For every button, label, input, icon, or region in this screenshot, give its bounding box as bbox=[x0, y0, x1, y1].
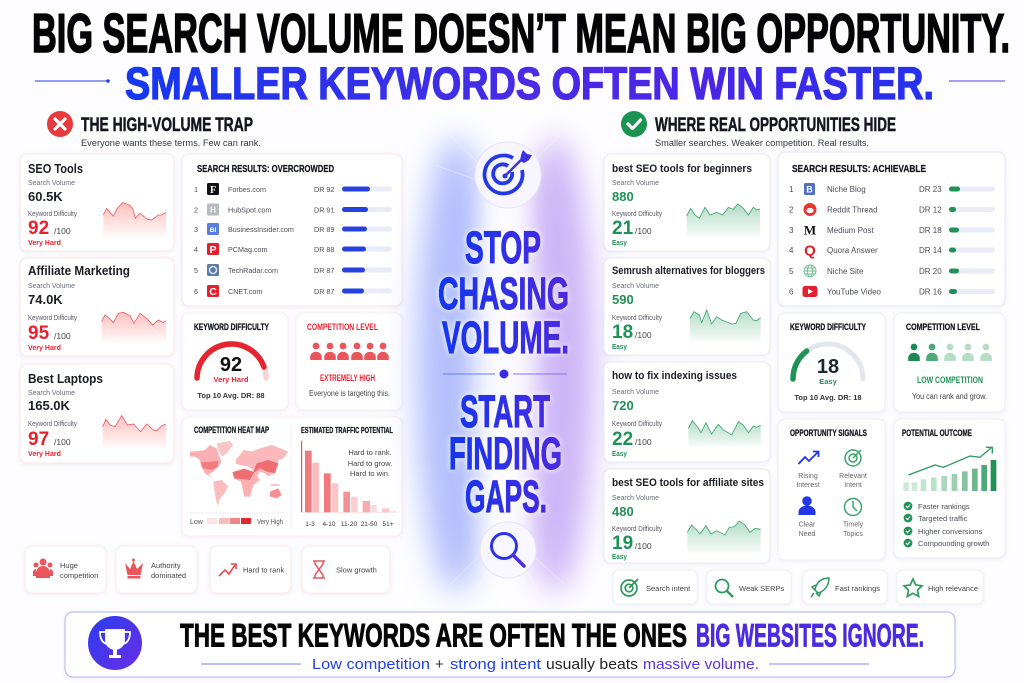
subheading text: Everyone wants these terms. Few can rank. bbox=[81, 138, 261, 149]
left rule bbox=[35, 79, 110, 83]
panel: right keyword card best SEO tools for beginners: Search Volume bbox=[612, 178, 659, 187]
row: CNET: C bbox=[209, 286, 217, 298]
icon: people row bbox=[310, 343, 389, 360]
traffic heading: ESTIMATED TRAFFIC POTENTIAL bbox=[301, 425, 393, 435]
signal: rising interest: Interest bbox=[796, 482, 820, 489]
row: HubSpot: H bbox=[210, 206, 216, 214]
signal: rising interest bbox=[796, 452, 820, 489]
icon: group bbox=[33, 558, 53, 578]
panel heading: SEARCH RESULTS: ACHIEVABLE bbox=[792, 163, 926, 175]
panel: heat map and traffic potential bbox=[182, 417, 402, 536]
panel: left keyword card SEO Tools: /100 bbox=[54, 226, 71, 236]
outcome list: Compounding growth bbox=[918, 539, 989, 548]
panel: keyword difficulty left: 92 bbox=[220, 354, 242, 376]
bar axis labels: 21-50 bbox=[361, 521, 378, 528]
divider with dot bbox=[443, 370, 567, 378]
panel: right keyword card Semrush alternatives: Semrush alternatives for bloggers bbox=[612, 265, 765, 277]
panel heading: SEARCH RESULTS: OVERCROWDED bbox=[197, 163, 334, 175]
panel: left keyword card Affiliate Marketing: /100 bbox=[54, 331, 71, 341]
panel: keyword difficulty right: KEYWORD DIFFICULTY bbox=[790, 322, 866, 332]
callout: start finding gaps: GAPS. bbox=[465, 471, 547, 522]
outcome list: Targeted traffic bbox=[918, 514, 968, 523]
panel: left keyword card Affiliate Marketing: Affiliate Marketing bbox=[28, 263, 130, 278]
panel: search results overcrowded bbox=[182, 154, 402, 306]
row: CNET: CNET.com bbox=[228, 287, 262, 296]
bar axis labels: 11-20 bbox=[341, 521, 357, 528]
heat map heading: COMPETITION HEAT MAP bbox=[194, 425, 269, 435]
icon: magnifier bbox=[480, 522, 536, 578]
bar axis labels: 4-10 bbox=[322, 521, 336, 528]
row: YouTube Video: DR 16 bbox=[919, 288, 942, 296]
panel: keyword difficulty left: Very Hard bbox=[213, 375, 249, 384]
chip: authority dominated bbox=[116, 546, 197, 593]
panel: left keyword card SEO Tools: Keyword Difficulty bbox=[28, 211, 77, 218]
panel: right keyword card best SEO tools for beginners: Keyword Difficulty bbox=[612, 211, 662, 218]
panel: left keyword card SEO Tools: 92 bbox=[28, 218, 49, 239]
panel: opportunity signals bbox=[778, 419, 885, 560]
row: PCMag: 4 bbox=[194, 245, 198, 254]
outcome list: Faster rankings bbox=[918, 502, 970, 511]
callout: stop chasing volume: STOP bbox=[465, 222, 541, 273]
callout: start finding gaps bbox=[449, 386, 562, 522]
callout: start finding gaps: FINDING bbox=[449, 428, 562, 479]
chip: search intent: Search intent bbox=[646, 584, 691, 593]
panel: left keyword card SEO Tools: SEO Tools bbox=[28, 161, 83, 176]
signal: timely topics: Topics bbox=[843, 531, 863, 538]
row: Reddit Thread bbox=[789, 203, 995, 216]
chart: sparkline bbox=[687, 521, 761, 553]
panel: left keyword card Affiliate Marketing: Very Hard bbox=[28, 343, 61, 352]
panel: left keyword card Affiliate Marketing: 95 bbox=[28, 323, 50, 344]
row: TechRadar: TechRadar.com bbox=[228, 266, 278, 275]
row: Quora Answer: Quora Answer bbox=[827, 246, 878, 255]
panel: left keyword card SEO Tools: 60.5K bbox=[28, 189, 63, 204]
panel: right keyword card how to fix indexing issues: Easy bbox=[612, 449, 628, 458]
row: HubSpot: DR 91 bbox=[314, 206, 334, 214]
panel: right keyword card best SEO tools for beginners: 880 bbox=[612, 189, 634, 204]
icon: trophy bbox=[88, 616, 142, 670]
panel: right keyword card Semrush alternatives: Keyword Difficulty bbox=[612, 315, 662, 322]
map legend: Low bbox=[190, 519, 204, 526]
banner tagline: + bbox=[435, 656, 444, 673]
row: Medium Post bbox=[789, 222, 995, 238]
chip: fast rankings bbox=[803, 570, 887, 604]
panel: keyword difficulty left: Top 10 Avg. DR: 88 bbox=[197, 391, 265, 400]
row: TechRadar: 5 bbox=[194, 266, 198, 275]
panel: left keyword card Best Laptops: 165.0K bbox=[28, 398, 71, 413]
banner headline: THE BEST KEYWORDS ARE OFTEN THE ONES bbox=[180, 618, 687, 654]
panel: opportunity signals: OPPORTUNITY SIGNALS bbox=[790, 428, 867, 438]
chart annotation bbox=[348, 448, 392, 478]
panel: right keyword card Semrush alternatives: Search Volume bbox=[612, 281, 659, 290]
row: CNET: 6 bbox=[194, 287, 198, 296]
callout: stop chasing volume bbox=[438, 222, 569, 363]
panel: right keyword card how to fix indexing issues: 720 bbox=[612, 398, 634, 413]
chart annotation: Hard to win. bbox=[350, 469, 390, 478]
row: Niche Blog: 1 bbox=[789, 185, 794, 194]
panel: right keyword card how to fix indexing issues: Keyword Difficulty bbox=[612, 421, 662, 428]
chart: sparkline bbox=[688, 421, 761, 447]
row: Niche Blog: B bbox=[806, 184, 813, 194]
row: TechRadar: DR 87 bbox=[314, 266, 334, 275]
row: PCMag: P bbox=[209, 244, 217, 256]
outcome list bbox=[904, 502, 989, 548]
panel: right keyword card best SEO tools for affiliate sites bbox=[604, 469, 770, 563]
signal: clear need bbox=[798, 496, 816, 538]
banner tagline: massive volume. bbox=[643, 656, 759, 673]
panel: right keyword card how to fix indexing issues: Search Volume bbox=[612, 387, 659, 396]
row: Reddit Thread: DR 12 bbox=[919, 206, 942, 214]
signal: relevant intent: Relevant bbox=[839, 473, 867, 480]
right rule bbox=[949, 80, 1005, 82]
row: CNET: DR 87 bbox=[314, 287, 334, 296]
bar axis labels: 51+ bbox=[382, 521, 394, 528]
chart: world map bbox=[190, 441, 288, 506]
row: CNET bbox=[194, 285, 392, 298]
icon: star bbox=[904, 579, 922, 596]
row: Quora Answer bbox=[789, 242, 995, 260]
callout: stop chasing volume: CHASING bbox=[438, 268, 569, 319]
panel: right keyword card Semrush alternatives bbox=[604, 258, 770, 355]
panel: left keyword card Affiliate Marketing: Search Volume bbox=[28, 281, 75, 290]
panel: left keyword card Affiliate Marketing: Keyword Difficulty bbox=[28, 315, 77, 322]
banner tagline: Low competition bbox=[312, 656, 430, 673]
chip: fast rankings: Fast rankings bbox=[835, 584, 880, 593]
chip: huge competition: competition bbox=[60, 571, 98, 580]
chart: sparkline bbox=[690, 310, 761, 342]
panel: competition level right: You can rank and grow. bbox=[912, 392, 987, 401]
row: PCMag bbox=[194, 243, 392, 256]
chip: slow growth bbox=[302, 546, 390, 593]
chart: sparkline bbox=[103, 203, 166, 237]
icon: target bbox=[475, 142, 541, 208]
panel: competition level left: EXTREMELY HIGH bbox=[320, 373, 375, 383]
row: Forbes bbox=[194, 183, 392, 196]
row: BusinessInsider: BI bbox=[210, 227, 216, 234]
panel: competition level left bbox=[296, 313, 402, 410]
panel: right keyword card Semrush alternatives: 18 bbox=[612, 322, 633, 343]
chip: high relevance: High relevance bbox=[928, 584, 978, 593]
signal: relevant intent bbox=[839, 450, 867, 489]
panel: left keyword card Best Laptops: Very Hard bbox=[28, 449, 61, 458]
panel: competition level right bbox=[894, 313, 1005, 412]
panel: right keyword card best SEO tools for affiliate sites: Search Volume bbox=[612, 493, 659, 502]
row: Niche Blog: DR 23 bbox=[919, 185, 942, 194]
chip: huge competition bbox=[25, 546, 106, 593]
panel: keyword difficulty left bbox=[182, 313, 288, 410]
panel: keyword difficulty right: Easy bbox=[819, 377, 838, 386]
panel: left keyword card Best Laptops: Keyword Difficulty bbox=[28, 421, 77, 428]
banner tagline bbox=[312, 656, 759, 673]
panel: right keyword card Semrush alternatives: /100 bbox=[635, 330, 652, 340]
row: Niche Site bbox=[789, 265, 995, 277]
chart: gauge bbox=[197, 344, 266, 378]
panel: right keyword card best SEO tools for beginners: Easy bbox=[612, 238, 628, 247]
row: Niche Site: Niche Site bbox=[827, 267, 864, 276]
row: PCMag: DR 88 bbox=[314, 245, 334, 254]
chip: weak serps: Weak SERPs bbox=[739, 584, 785, 593]
outcome list: Higher conversions bbox=[918, 527, 982, 536]
panel: competition level left: COMPETITION LEVEL bbox=[307, 322, 378, 332]
panel: right keyword card how to fix indexing issues: 22 bbox=[612, 429, 633, 450]
chart: sparkline bbox=[102, 312, 166, 343]
right section heading bbox=[621, 111, 896, 149]
icon: people row bbox=[908, 344, 992, 361]
panel: left keyword card SEO Tools: Search Volume bbox=[28, 178, 75, 187]
panel: keyword difficulty right: Top 10 Avg. DR: 18 bbox=[794, 393, 862, 402]
panel: right keyword card best SEO tools for affiliate sites: 19 bbox=[612, 533, 633, 554]
row: Quora Answer: DR 14 bbox=[919, 246, 942, 255]
chip: slow growth: Slow growth bbox=[336, 566, 377, 574]
row: Niche Site: 5 bbox=[789, 267, 794, 276]
chip: huge competition: Huge bbox=[60, 561, 78, 570]
panel: right keyword card best SEO tools for beginners: best SEO tools for beginners bbox=[612, 163, 752, 175]
panel: left keyword card SEO Tools bbox=[20, 154, 174, 251]
row: Forbes: F bbox=[210, 185, 216, 196]
icon: red cross bbox=[47, 111, 73, 137]
row: TechRadar bbox=[194, 264, 392, 276]
banner tagline: usually beats bbox=[546, 656, 638, 673]
row: PCMag: PCMag.com bbox=[228, 245, 268, 254]
chart: sparkline bbox=[687, 204, 760, 237]
row: Quora Answer: Q bbox=[804, 242, 816, 260]
row: BusinessInsider: BusinessInsider.com bbox=[228, 225, 294, 234]
signal: clear need: Need bbox=[799, 531, 815, 538]
panel: right keyword card how to fix indexing issues bbox=[604, 362, 770, 462]
panel: left keyword card SEO Tools: Very Hard bbox=[28, 238, 61, 247]
callout: stop chasing volume: VOLUME. bbox=[442, 312, 569, 363]
row: Niche Blog bbox=[789, 183, 995, 195]
panel: potential outcome bbox=[894, 419, 1005, 558]
chart: sparkline bbox=[103, 416, 166, 448]
panel: bottom banner bbox=[65, 612, 955, 677]
signal: timely topics: Timely bbox=[843, 522, 864, 528]
title bbox=[32, 3, 1010, 109]
row: YouTube Video: 6 bbox=[789, 288, 794, 296]
icon: green check bbox=[621, 111, 647, 137]
signal: relevant intent: Intent bbox=[844, 482, 862, 489]
map legend: Very High bbox=[257, 517, 283, 526]
chip: weak serps bbox=[707, 570, 791, 604]
signal: rising interest: Rising bbox=[798, 473, 818, 480]
subheading text: Smaller searches. Weaker competition. Real results. bbox=[655, 138, 869, 149]
icon: target bbox=[621, 579, 638, 596]
panel: right keyword card best SEO tools for affiliate sites: Easy bbox=[612, 552, 628, 561]
panel: left keyword card Affiliate Marketing bbox=[20, 258, 174, 356]
row: Medium Post: M bbox=[804, 222, 816, 238]
row: HubSpot: 2 bbox=[194, 206, 198, 214]
icon: magnifier bbox=[716, 580, 733, 597]
panel: right keyword card best SEO tools for beginners bbox=[604, 154, 770, 251]
panel: left keyword card Best Laptops: Search Volume bbox=[28, 388, 75, 397]
panel: search results achievable bbox=[778, 152, 1005, 306]
panel: right keyword card best SEO tools for affiliate sites: 480 bbox=[612, 504, 634, 519]
icon: trend arrow bbox=[219, 564, 236, 576]
left section heading bbox=[47, 111, 261, 149]
row: Medium Post: DR 18 bbox=[919, 226, 942, 235]
panel: right keyword card how to fix indexing issues: /100 bbox=[635, 437, 652, 447]
panel: left keyword card Best Laptops bbox=[20, 364, 174, 463]
panel: potential outcome: POTENTIAL OUTCOME bbox=[902, 428, 972, 438]
heading text: THE HIGH-VOLUME TRAP bbox=[81, 115, 253, 136]
row: HubSpot: HubSpot.com bbox=[228, 206, 272, 214]
row: Niche Site: DR 20 bbox=[919, 267, 942, 276]
row: YouTube Video bbox=[789, 286, 995, 297]
panel: right keyword card best SEO tools for affiliate sites: Keyword Difficulty bbox=[612, 526, 662, 533]
chip: search intent bbox=[613, 570, 697, 604]
panel: left keyword card Best Laptops: Best Laptops bbox=[28, 371, 103, 386]
map legend bbox=[190, 517, 283, 526]
panel: competition level right: LOW COMPETITION bbox=[917, 375, 983, 385]
panel: right keyword card best SEO tools for affiliate sites: /100 bbox=[635, 541, 652, 551]
row: Medium Post: 3 bbox=[789, 226, 794, 235]
icon: rocket bbox=[811, 578, 829, 597]
panel: competition level left: Everyone is targeting this. bbox=[309, 389, 390, 398]
bar axis labels bbox=[305, 521, 394, 528]
row: Medium Post: Medium Post bbox=[827, 226, 874, 235]
signal: timely topics bbox=[843, 498, 864, 538]
panel: left keyword card Best Laptops: /100 bbox=[54, 437, 71, 447]
row: HubSpot bbox=[194, 204, 392, 216]
bar axis labels: 1-3 bbox=[305, 521, 315, 528]
panel: right keyword card Semrush alternatives: 590 bbox=[612, 292, 634, 307]
row: Forbes: 1 bbox=[194, 185, 198, 194]
row: Reddit Thread: 2 bbox=[789, 206, 794, 214]
panel: competition level right: COMPETITION LEVEL bbox=[906, 322, 980, 332]
panel: left keyword card Best Laptops: 97 bbox=[28, 429, 49, 450]
chip: authority dominated: dominated bbox=[151, 571, 186, 580]
signal: clear need: Clear bbox=[799, 522, 816, 528]
panel: keyword difficulty left: KEYWORD DIFFICULTY bbox=[194, 322, 269, 332]
row: BusinessInsider: DR 89 bbox=[314, 225, 334, 234]
chip: hard to rank: Hard to rank bbox=[243, 566, 285, 574]
chart: growth bars and line bbox=[903, 447, 996, 491]
row: YouTube Video: YouTube Video bbox=[827, 288, 882, 296]
panel: centre glow column bbox=[416, 135, 595, 595]
row: Reddit Thread: Reddit Thread bbox=[827, 206, 878, 214]
chip: hard to rank bbox=[210, 546, 291, 593]
icon: crown bbox=[125, 558, 143, 578]
panel: right keyword card how to fix indexing issues: how to fix indexing issues bbox=[612, 370, 737, 382]
heading text: WHERE REAL OPPORTUNITIES HIDE bbox=[655, 115, 896, 136]
row: Forbes: DR 92 bbox=[314, 185, 334, 194]
row: Forbes: Forbes.com bbox=[228, 185, 266, 194]
panel: keyword difficulty right bbox=[778, 313, 885, 412]
row: Quora Answer: 4 bbox=[789, 246, 794, 255]
chip: high relevance bbox=[897, 570, 983, 604]
row: Niche Blog: Niche Blog bbox=[827, 185, 866, 194]
callout: start finding gaps: START bbox=[460, 386, 550, 437]
panel: right keyword card best SEO tools for beginners: /100 bbox=[635, 226, 652, 236]
panel: right keyword card best SEO tools for affiliate sites: best SEO tools for affiliate sites bbox=[612, 477, 764, 489]
panel: right keyword card Semrush alternatives: Easy bbox=[612, 342, 628, 351]
chart annotation: Hard to grow. bbox=[348, 459, 392, 468]
chip: authority dominated: Authority bbox=[151, 561, 181, 570]
row: BusinessInsider bbox=[194, 223, 392, 235]
panel: keyword difficulty right: 18 bbox=[817, 356, 839, 378]
panel: right keyword card best SEO tools for beginners: 21 bbox=[612, 218, 634, 239]
icon: hourglass bbox=[313, 561, 325, 578]
chart annotation: Hard to rank. bbox=[348, 448, 392, 457]
chart: traffic bars bbox=[302, 441, 397, 512]
banner tagline: strong intent bbox=[450, 656, 542, 673]
chart: gauge bbox=[793, 344, 863, 379]
panel: left keyword card Affiliate Marketing: 74.0K bbox=[28, 292, 63, 307]
row: BusinessInsider: 3 bbox=[194, 225, 198, 234]
